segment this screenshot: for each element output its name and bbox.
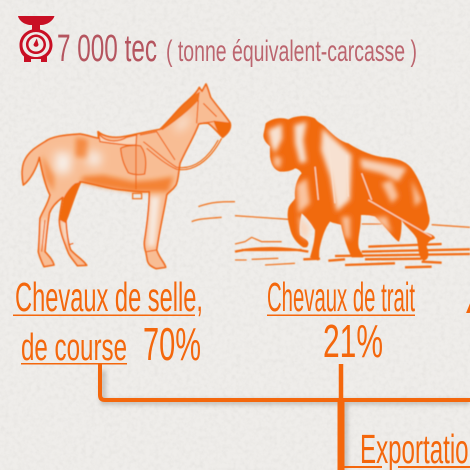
title: tonnage: 7 000 tec bbox=[57, 28, 157, 70]
label: saddle and racing horses: Chevaux de selle, bbox=[15, 274, 203, 320]
label: saddle and racing horses bbox=[13, 274, 203, 370]
title: tonnage bbox=[57, 28, 417, 70]
illustration: saddle horse bbox=[22, 84, 230, 269]
label: draft horses: 21% bbox=[323, 315, 383, 367]
connector lines bbox=[100, 364, 470, 470]
label: saddle and racing horses: 70% bbox=[143, 318, 201, 370]
illustration: draft horses bbox=[192, 116, 470, 267]
label: saddle and racing horses: de course bbox=[21, 327, 127, 369]
label: draft horses bbox=[267, 274, 415, 367]
icon: kitchen scale bbox=[18, 16, 54, 62]
